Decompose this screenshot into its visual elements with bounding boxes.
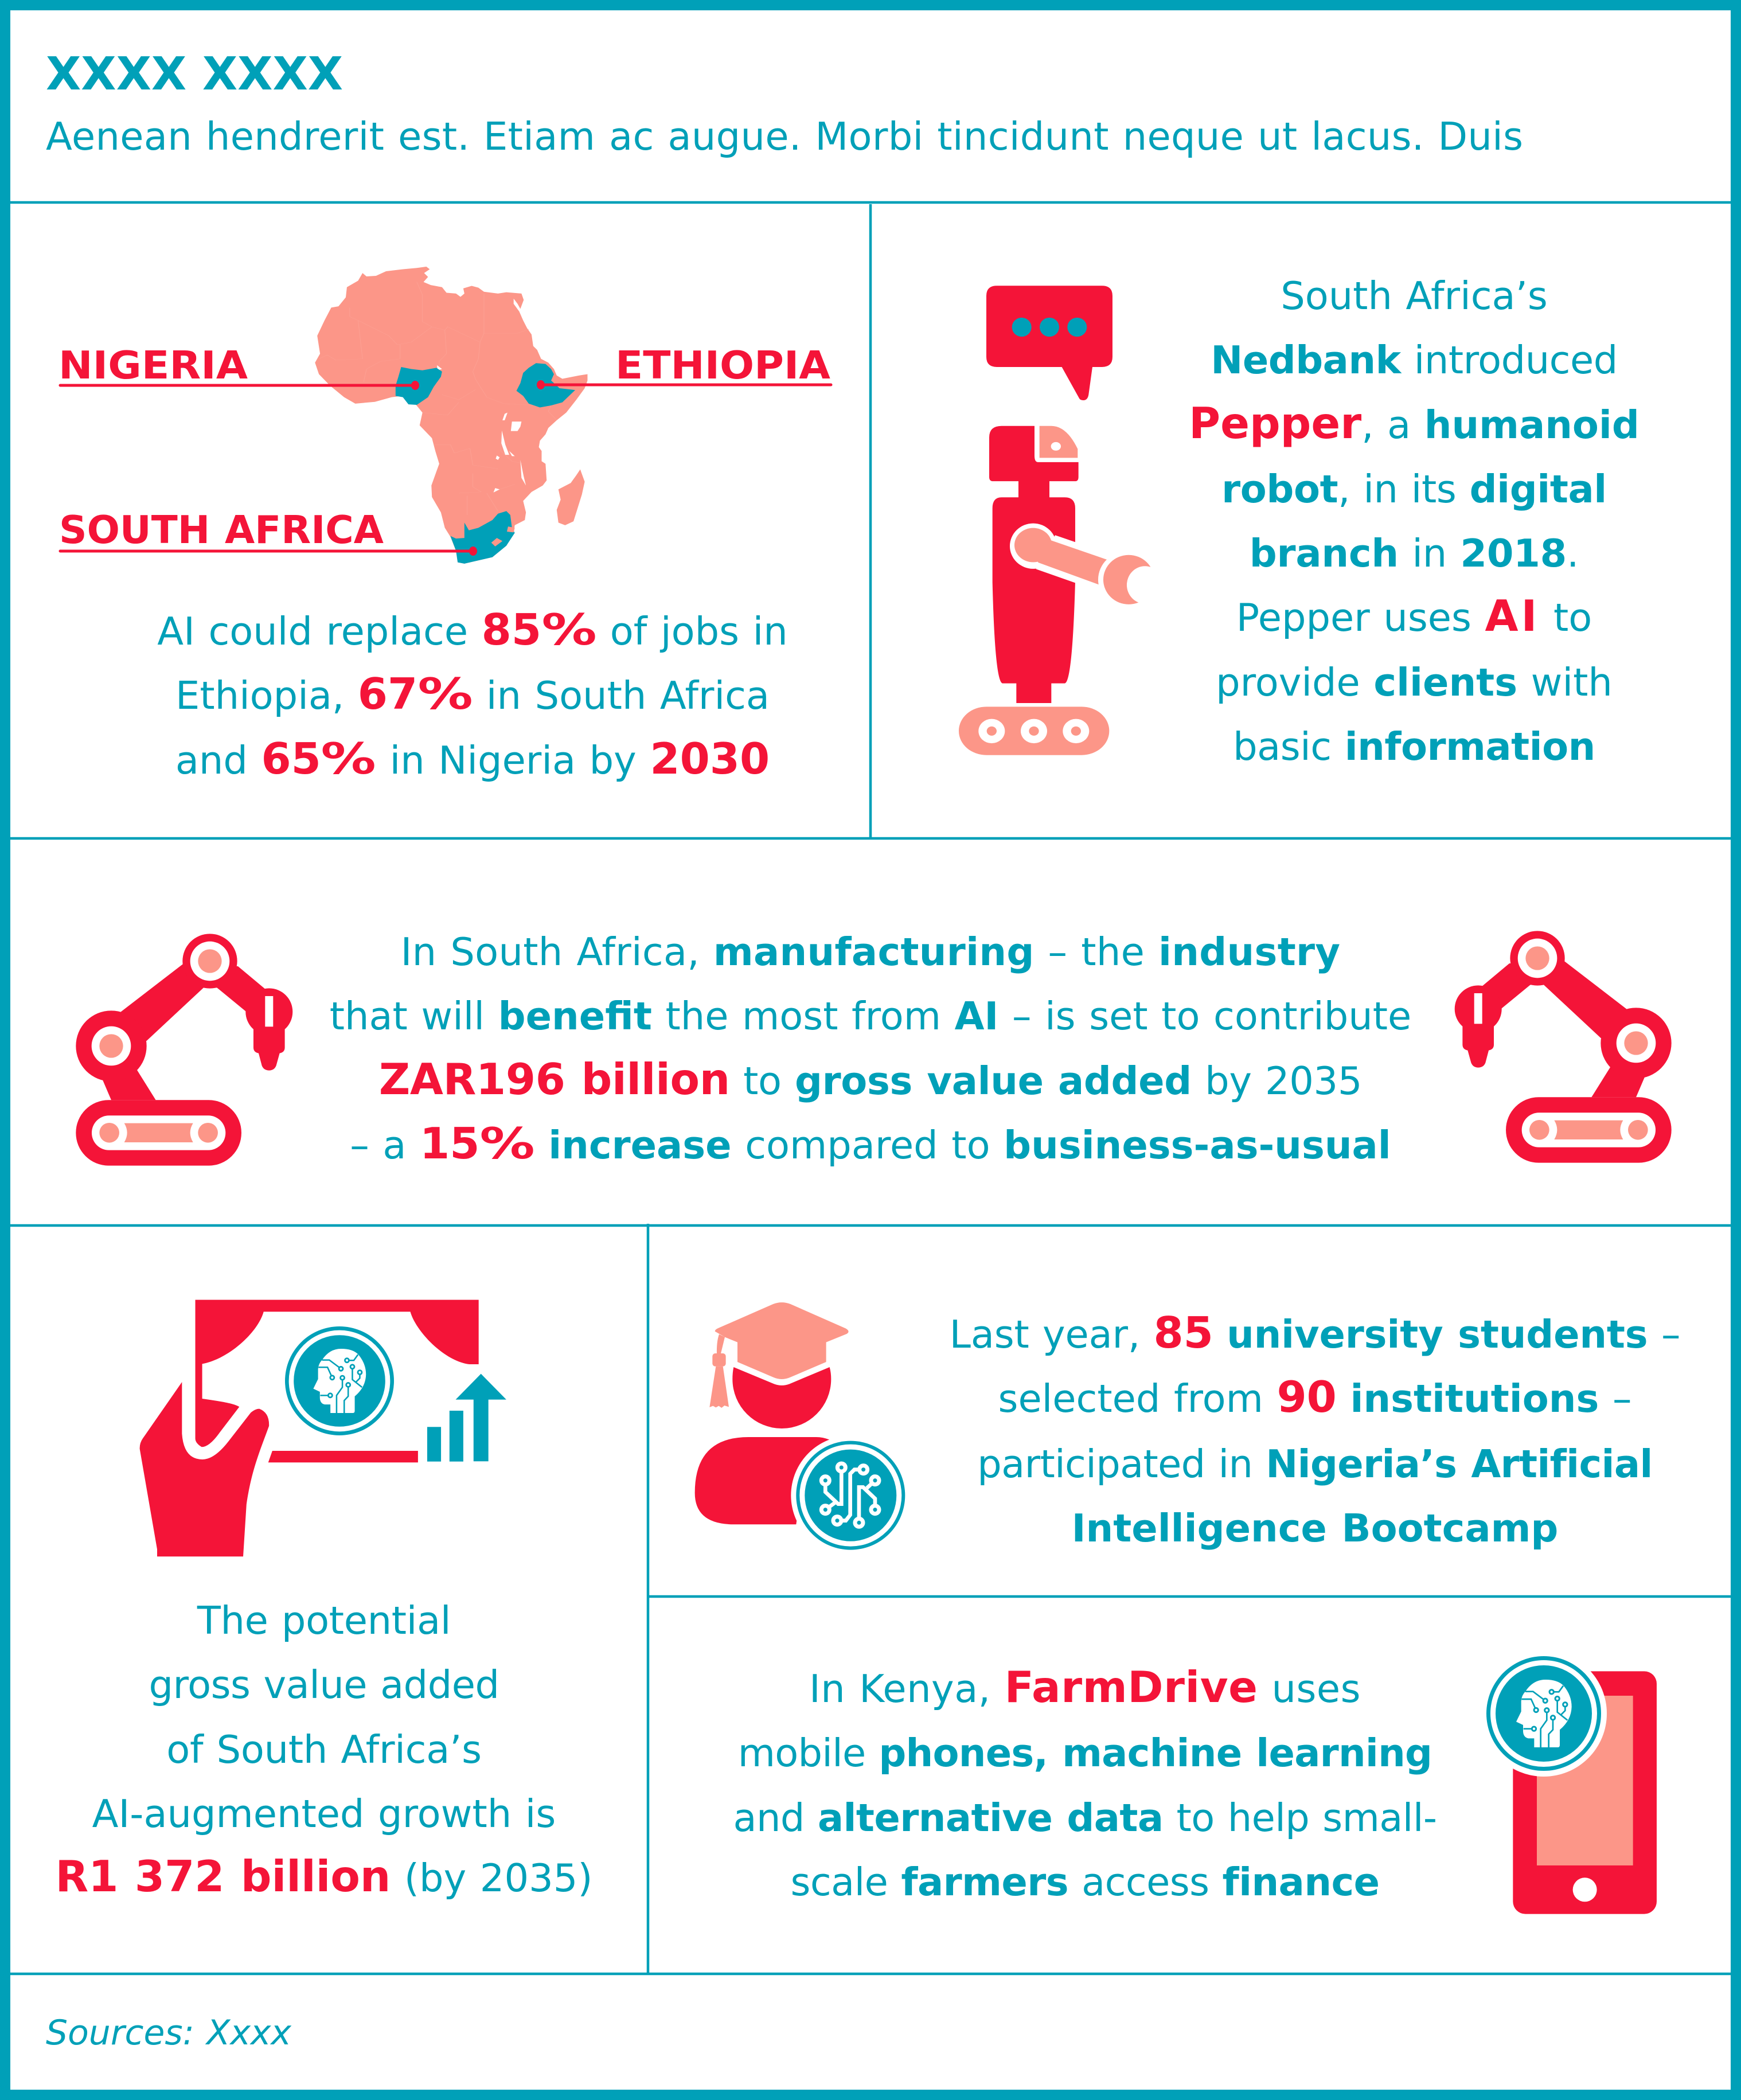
text: Nedbank Pepper robot: provide clients with [1216, 660, 1613, 705]
text: university students: Last year, 85 university students – [950, 1307, 1680, 1358]
icon: hand holding banknote [140, 1300, 506, 1556]
text: AI job replacement: AI could replace 85 of jobs in [157, 604, 788, 655]
text: AI job replacement: Ethiopia, 67 in South Africa [175, 669, 770, 719]
text: FarmDrive: and alternative data to help small- [733, 1795, 1436, 1840]
label: Ethiopia: ETHIOPIA [615, 343, 830, 388]
text: gross value added: AI-augmented growth is [92, 1791, 556, 1836]
text: FarmDrive: scale farmers access finance [790, 1860, 1380, 1904]
text: Nedbank Pepper robot: Pepper, a humanoid [1189, 398, 1639, 448]
text: manufacturing: – a 15 increase compared to business-as-usual [350, 1118, 1391, 1169]
text: Nedbank Pepper robot: South Africa’s [1281, 274, 1548, 318]
title: XXXX XXXX [46, 47, 343, 100]
text: university students: participated in Nigeria’s Artificial [977, 1442, 1653, 1486]
text: manufacturing: that will benefit the most from AI – is set to contribute [330, 994, 1411, 1039]
icon: graduate with circuit badge [695, 1302, 910, 1555]
text: FarmDrive: In Kenya, FarmDrive uses [809, 1662, 1361, 1712]
student head [732, 1367, 831, 1428]
text: gross value added: of South Africa’s [166, 1727, 482, 1772]
label: South Africa: SOUTH AFRICA [59, 508, 384, 552]
text: gross value added: R1 372 billion (by 2035) [56, 1851, 592, 1902]
text: AI job replacement: and 65 in Nigeria by 2030 [175, 733, 770, 784]
label: Ethiopia [537, 343, 831, 389]
label: Nigeria [58, 343, 419, 390]
hand [140, 1382, 269, 1556]
banknote [196, 1300, 479, 1462]
text: Nedbank Pepper robot: Nedbank introduced [1211, 338, 1618, 382]
speech bubble [986, 286, 1112, 400]
map: continent [315, 267, 587, 564]
text: AI job replacement [157, 604, 788, 784]
subtitle: Aenean hendrerit est. Etiam ac augue. Morbi tincidunt neque ut lacus. Duis [46, 114, 1523, 159]
icon: humanoid robot with speech bubble [959, 286, 1163, 755]
text: Nedbank Pepper robot: Pepper uses AI to [1236, 591, 1592, 641]
text: FarmDrive [733, 1662, 1436, 1904]
map: Africa [58, 267, 831, 564]
text: Nedbank Pepper robot: basic information [1233, 724, 1595, 769]
text: university students: selected from 90 institutions – [998, 1372, 1631, 1422]
robot base [959, 706, 1109, 755]
circuit badge [791, 1436, 910, 1555]
text: university students: Intelligence Bootcamp [1072, 1506, 1558, 1551]
text: gross value added: gross value added [149, 1662, 499, 1707]
map: South Africa [450, 511, 515, 564]
text: gross value added: The potential [197, 1598, 451, 1643]
text: Nedbank Pepper robot: robot, in its digital [1221, 467, 1607, 512]
label: Nigeria: NIGERIA [58, 343, 248, 388]
text: manufacturing: % [479, 1118, 535, 1169]
sources: Sources: Xxxx [46, 2013, 291, 2053]
graduation cap [709, 1302, 849, 1408]
text: manufacturing: In South Africa, manufacturing – the industry [401, 930, 1340, 974]
text: AI job replacement: % [541, 604, 596, 655]
text: gross value added [56, 1598, 592, 1902]
text: manufacturing [330, 930, 1411, 1169]
robot arm [1010, 524, 1163, 608]
text: FarmDrive: mobile phones, machine learning [738, 1731, 1432, 1775]
icon: smartphone with AI badge [1481, 1650, 1657, 1914]
student body [695, 1437, 830, 1524]
map: Ethiopia [517, 363, 575, 408]
text: Nedbank Pepper robot: branch in 2018. [1250, 531, 1579, 576]
text: university students [950, 1307, 1680, 1551]
text: manufacturing: ZAR196 billion to gross value added by 2035 [379, 1054, 1362, 1104]
robot visor [1040, 426, 1078, 458]
map: lakes [437, 365, 526, 493]
growth bars and arrow [427, 1374, 506, 1462]
text: AI job replacement: % [417, 669, 473, 719]
icon: robot arm right [1455, 931, 1672, 1163]
icon: robot arm left [76, 934, 292, 1166]
AI head badge [1481, 1650, 1607, 1777]
text: Nedbank Pepper robot [1189, 274, 1639, 769]
robot body [989, 426, 1079, 703]
text: AI job replacement: % [321, 733, 376, 784]
map: Nigeria [396, 367, 442, 405]
icon: AI head badge [285, 1326, 394, 1435]
